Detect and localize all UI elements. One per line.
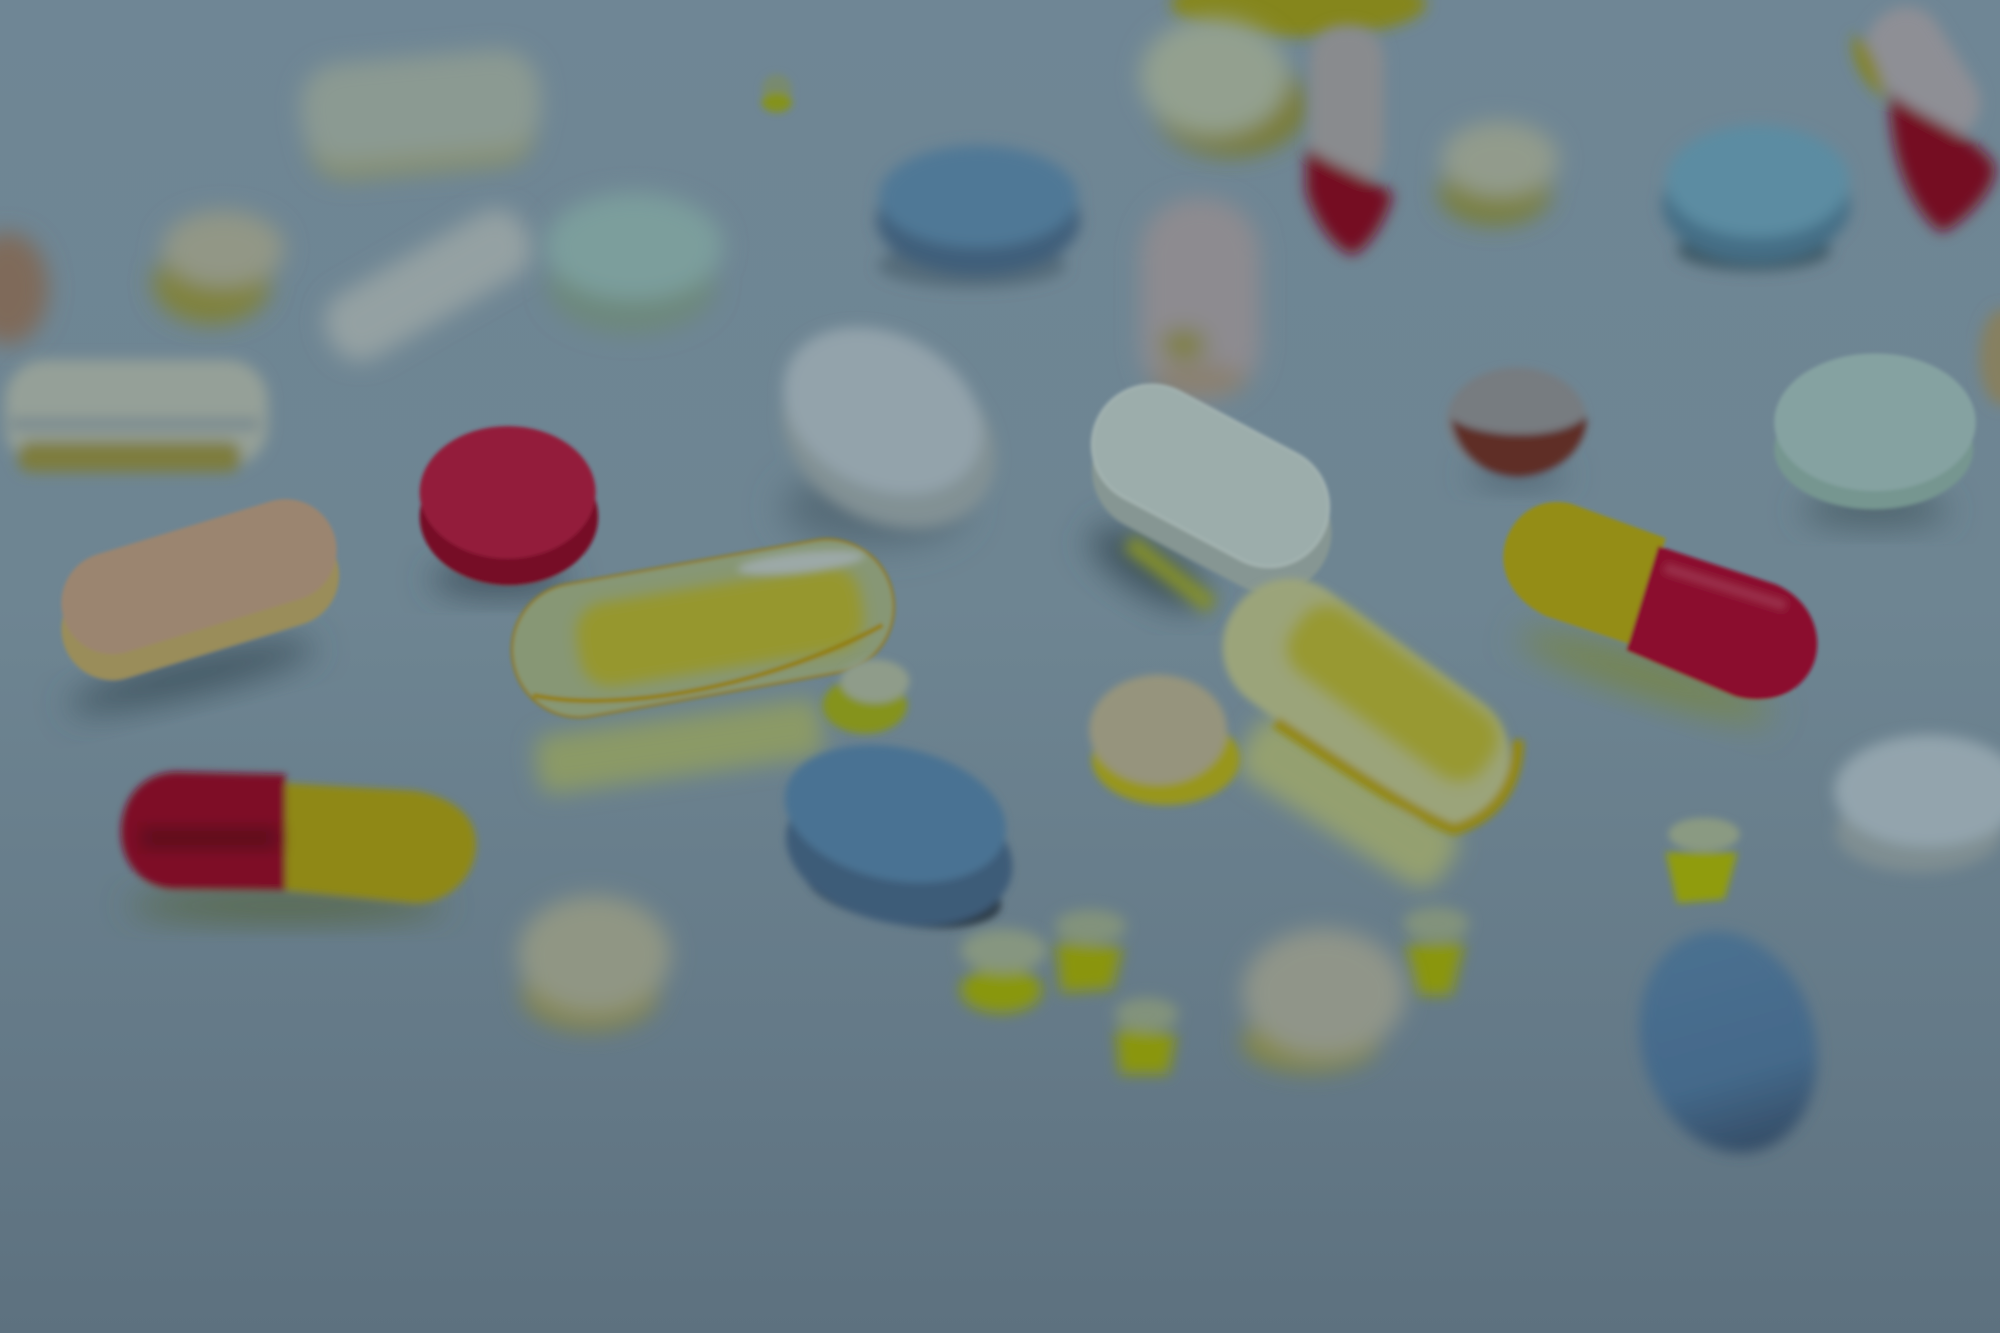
pill: left white striped capsule	[5, 360, 268, 472]
pill: large white oval	[750, 294, 1028, 563]
pill: small cream yellow	[1439, 121, 1559, 225]
softgel body	[502, 529, 904, 728]
pill: red and yellow capsule left	[121, 772, 476, 920]
pill: blue oval center	[772, 726, 1026, 946]
pill: cream tablet bottom	[518, 895, 671, 1031]
pill: cream tablet bottom center	[1242, 929, 1406, 1071]
capsule yellow half	[1503, 502, 1666, 644]
small tablet 4	[1403, 907, 1469, 995]
pill: long white capsule	[313, 198, 543, 372]
capsule dark band	[140, 827, 278, 850]
pill: red and yellow capsule right	[1503, 502, 1817, 736]
pill: top right red capsule	[1853, 0, 1995, 232]
pill: bottom small green tablets	[960, 818, 1740, 1074]
softgel reflection	[1230, 707, 1467, 896]
pill: white oblong tablet center	[1070, 364, 1353, 624]
pill: pink capsule	[1140, 198, 1260, 402]
pill: cream yellow tablet left	[153, 211, 284, 324]
pill: left edge brown	[0, 232, 48, 344]
capsule red half	[1626, 546, 1817, 700]
pill: red tablet	[420, 426, 598, 594]
pill: softgel right	[1196, 552, 1536, 896]
pill: tan oblong tablet	[49, 486, 352, 724]
pill: cream and yellow tablet center	[1089, 675, 1240, 805]
pill: white tablet right edge	[1834, 735, 2000, 872]
capsule highlight	[1665, 568, 1786, 606]
pill: blue tablet top	[876, 145, 1080, 288]
pill: top red and white capsule	[1306, 26, 1393, 255]
pill: blue oval bottom right	[1614, 910, 1843, 1174]
pill: teal speckled tablet	[1774, 353, 1976, 526]
small tablet 3	[1115, 997, 1179, 1074]
pill: small top yellow	[761, 74, 792, 112]
pill: small green tablet near softgel	[823, 659, 909, 733]
softgel body	[1196, 552, 1536, 851]
pill: light blue tablet	[1662, 125, 1851, 270]
small tablet 5	[1666, 818, 1740, 903]
pill: brown tablet	[1446, 367, 1587, 486]
small tablet 1	[960, 929, 1047, 1013]
pill: green tablet	[545, 193, 723, 334]
capsule red half	[121, 772, 286, 890]
pill: top-left white tablet	[297, 46, 545, 183]
pill: right edge tablet	[1980, 309, 2000, 406]
small tablet 2	[1055, 909, 1126, 992]
softgel reflection	[533, 697, 825, 795]
pill: center left softgel	[502, 529, 904, 795]
capsule yellow half	[286, 783, 476, 903]
pill: top yellow softgel	[1171, 0, 1426, 37]
pill: top white yellow tablet	[1140, 18, 1307, 156]
